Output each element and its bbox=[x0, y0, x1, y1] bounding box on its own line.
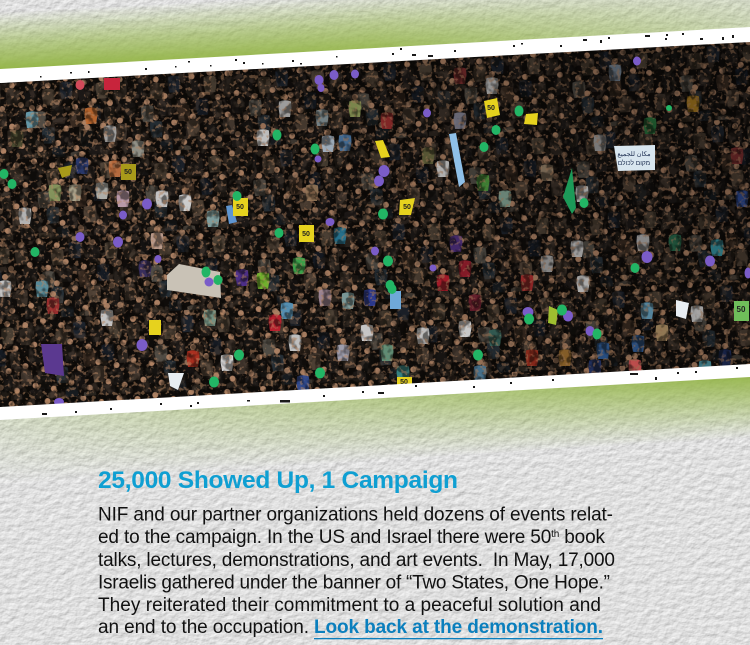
body text: th bbox=[551, 529, 559, 540]
top white band with speckles bbox=[0, 27, 750, 83]
signs and flags: 50 bbox=[403, 204, 411, 211]
body text: They reiterated their commitment to a peaceful solution and bbox=[98, 595, 601, 616]
body text: an end to the occupation. bbox=[98, 617, 309, 638]
bottom white band with speckles bbox=[0, 364, 750, 420]
photo: crowd at demonstration bbox=[0, 30, 750, 420]
signs and flags: 50 bbox=[400, 379, 408, 386]
body text: ed to the campaign. In the US and Israel there were 50 bbox=[98, 527, 551, 548]
balloons bbox=[0, 56, 750, 406]
body text: book bbox=[559, 527, 606, 548]
signs and flags: مكان للجميع bbox=[617, 150, 651, 158]
signs and flags: 50 bbox=[236, 204, 244, 211]
body text: Israelis gathered under the banner of “Two States, One Hope.” bbox=[98, 572, 610, 594]
body text bbox=[98, 504, 615, 638]
signs and flags bbox=[41, 78, 749, 390]
signs and flags: מקום לכולם bbox=[618, 159, 650, 167]
notable people in the crowd bbox=[0, 58, 748, 392]
heading: 25,000 Showed Up, 1 Campaign bbox=[98, 467, 458, 494]
top green gradient bbox=[0, 0, 750, 72]
body text: NIF and our partner organizations held dozens of events relat- bbox=[98, 504, 613, 526]
signs and flags: 50 bbox=[737, 305, 746, 314]
signs and flags: 50 bbox=[487, 105, 495, 112]
bottom green gradient bbox=[0, 377, 750, 468]
signs and flags: 50 bbox=[124, 169, 132, 176]
link: look back at the demonstration: Look back at the demonstration. bbox=[314, 617, 603, 638]
signs and flags: 50 bbox=[302, 231, 310, 238]
body text: talks, lectures, demonstrations, and art events. In May, 17,000 bbox=[98, 550, 615, 571]
